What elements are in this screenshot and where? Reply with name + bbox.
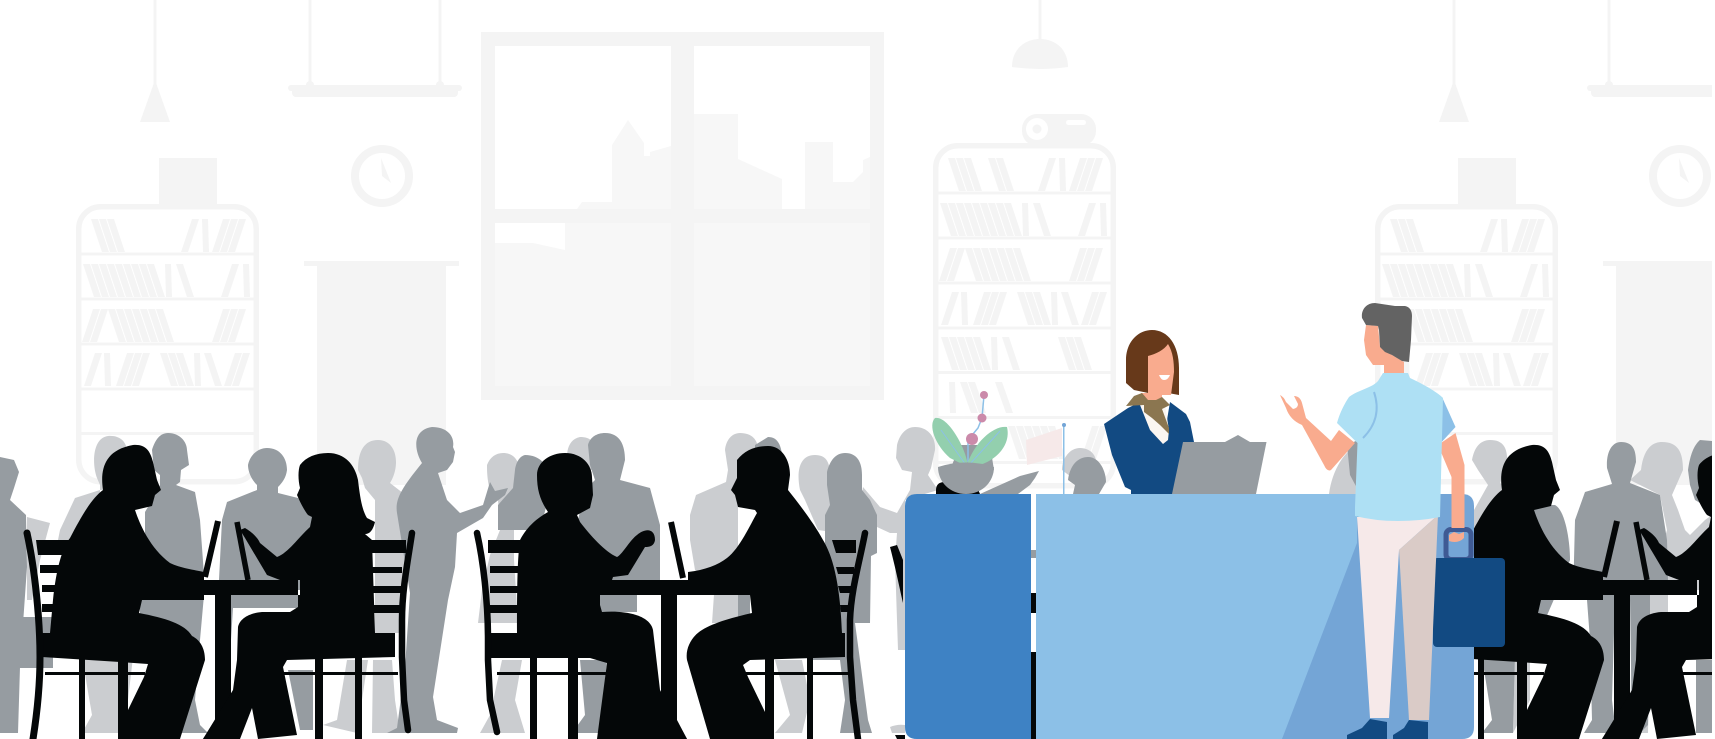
wall clock left (355, 149, 409, 203)
people at left cafe table (27, 445, 412, 739)
shirt crease (1363, 392, 1377, 438)
receptionist (1104, 330, 1194, 494)
bookcase right (1378, 158, 1555, 482)
arm holding briefcase (1438, 433, 1464, 528)
column left (304, 261, 459, 485)
light grey crowd silhouettes (27, 427, 1712, 733)
reception desk (905, 494, 1474, 739)
people at right cafe table (1474, 444, 1712, 739)
shirt sleeve (1438, 397, 1456, 446)
pendant lamp left (140, 0, 170, 122)
dome lamp (1012, 0, 1068, 69)
grey head behind desk (1068, 457, 1106, 494)
window with skyline (481, 32, 884, 400)
desk front shadow (1036, 494, 1474, 739)
small flag on desk (1026, 423, 1066, 494)
pendant lamp right (1439, 0, 1469, 122)
desk side panel (905, 494, 1031, 739)
hanging bar left (288, 0, 462, 97)
briefcase (1433, 530, 1505, 647)
wall clock right (1653, 149, 1707, 203)
projector on bookcase (1022, 114, 1096, 146)
desk gap (1031, 494, 1036, 739)
laptop (1172, 435, 1266, 494)
desk front light (1036, 494, 1357, 739)
hand on handle (1449, 532, 1464, 542)
hair (1362, 303, 1412, 362)
traveller (1280, 303, 1464, 739)
hanging bar right (1587, 0, 1715, 97)
gesturing arm (1280, 395, 1355, 470)
people at middle cafe table (477, 446, 905, 739)
shoes (1347, 719, 1428, 739)
bookcase centre (936, 146, 1113, 486)
bookcase left (79, 158, 256, 482)
shirt (1337, 373, 1443, 521)
trousers (1357, 515, 1438, 720)
neck and face (1364, 325, 1404, 376)
plant on desk (932, 391, 1008, 494)
pointing arm silhouette (980, 471, 1039, 494)
mid grey crowd silhouettes (0, 427, 1712, 733)
column right (1603, 261, 1715, 485)
